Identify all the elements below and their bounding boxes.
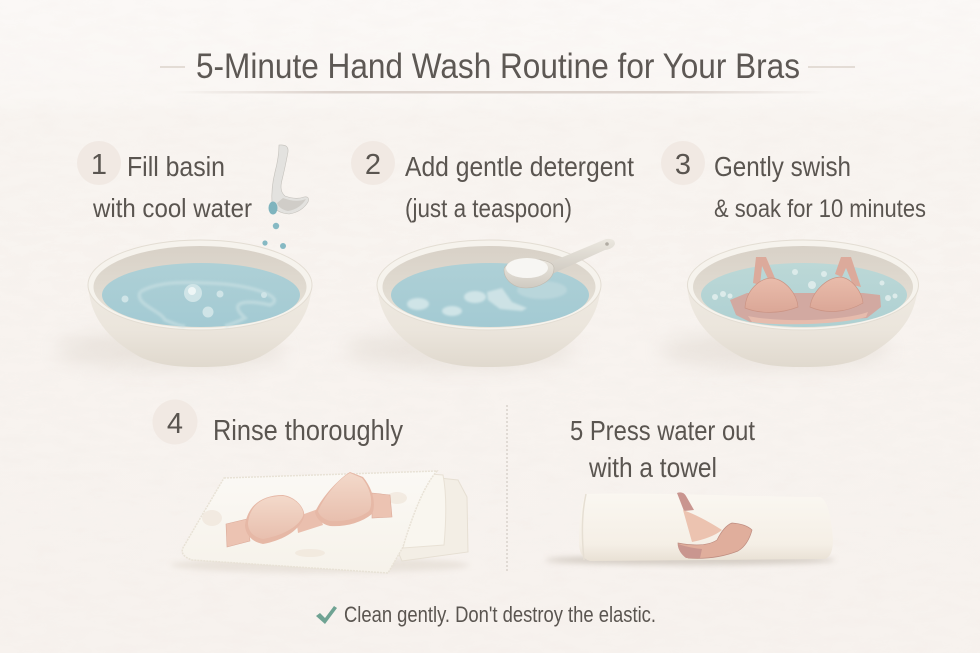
bowl 1	[55, 240, 312, 368]
step 2 label	[405, 151, 634, 223]
step 1: fill basin	[55, 141, 312, 368]
note text: Clean gently. Don't destroy the elastic.	[344, 602, 656, 627]
bra tucked in towel	[677, 492, 752, 558]
step 2 number badge: 2	[365, 149, 381, 181]
step 3 label: & soak for 10 minutes	[714, 195, 926, 223]
step 3 number badge	[661, 141, 705, 185]
bubbles	[712, 269, 898, 301]
step 5 label: 5 Press water out	[570, 415, 755, 446]
step 1 label	[92, 151, 252, 223]
step 3 label: Gently swish	[714, 151, 851, 182]
step 1 label: with cool water	[92, 193, 252, 223]
step 1 label: Fill basin	[127, 151, 225, 182]
step 3 number badge: 3	[675, 149, 691, 181]
icon: ladle with drops	[262, 145, 308, 249]
bra soaking in bowl	[730, 257, 881, 324]
towel damp stains	[202, 492, 407, 557]
closing note	[316, 602, 656, 627]
divider	[506, 405, 508, 573]
step 5 label: with a towel	[588, 452, 717, 483]
step 5: press water out	[545, 415, 835, 565]
step 2 label: Add gentle detergent	[405, 151, 634, 182]
bowl 2	[345, 239, 615, 368]
step 1 number badge: 1	[91, 149, 107, 181]
step 4 label: Rinse thoroughly	[213, 415, 403, 447]
icon: check mark	[316, 606, 337, 624]
step 5 label	[570, 415, 755, 483]
bowl 3	[660, 240, 918, 368]
bra on towel	[226, 472, 392, 547]
step 4 number badge: 4	[167, 408, 183, 440]
step 2: add detergent	[345, 141, 634, 368]
step 2 number badge	[351, 141, 395, 185]
icon: teaspoon	[504, 239, 615, 288]
suds on water	[407, 281, 567, 316]
water swirls and bubbles	[122, 282, 274, 326]
step 4 number badge	[152, 400, 198, 444]
step 1 number badge	[77, 141, 121, 185]
step 2 label: (just a teaspoon)	[405, 193, 572, 223]
folded towel with bra	[170, 471, 470, 573]
title: 5-Minute Hand Wash Routine for Your Bras	[196, 47, 800, 86]
rolled towel with bra	[545, 492, 835, 565]
step 3 label	[714, 151, 926, 223]
step 4: rinse	[152, 400, 470, 573]
step 3: swish and soak	[660, 141, 926, 368]
